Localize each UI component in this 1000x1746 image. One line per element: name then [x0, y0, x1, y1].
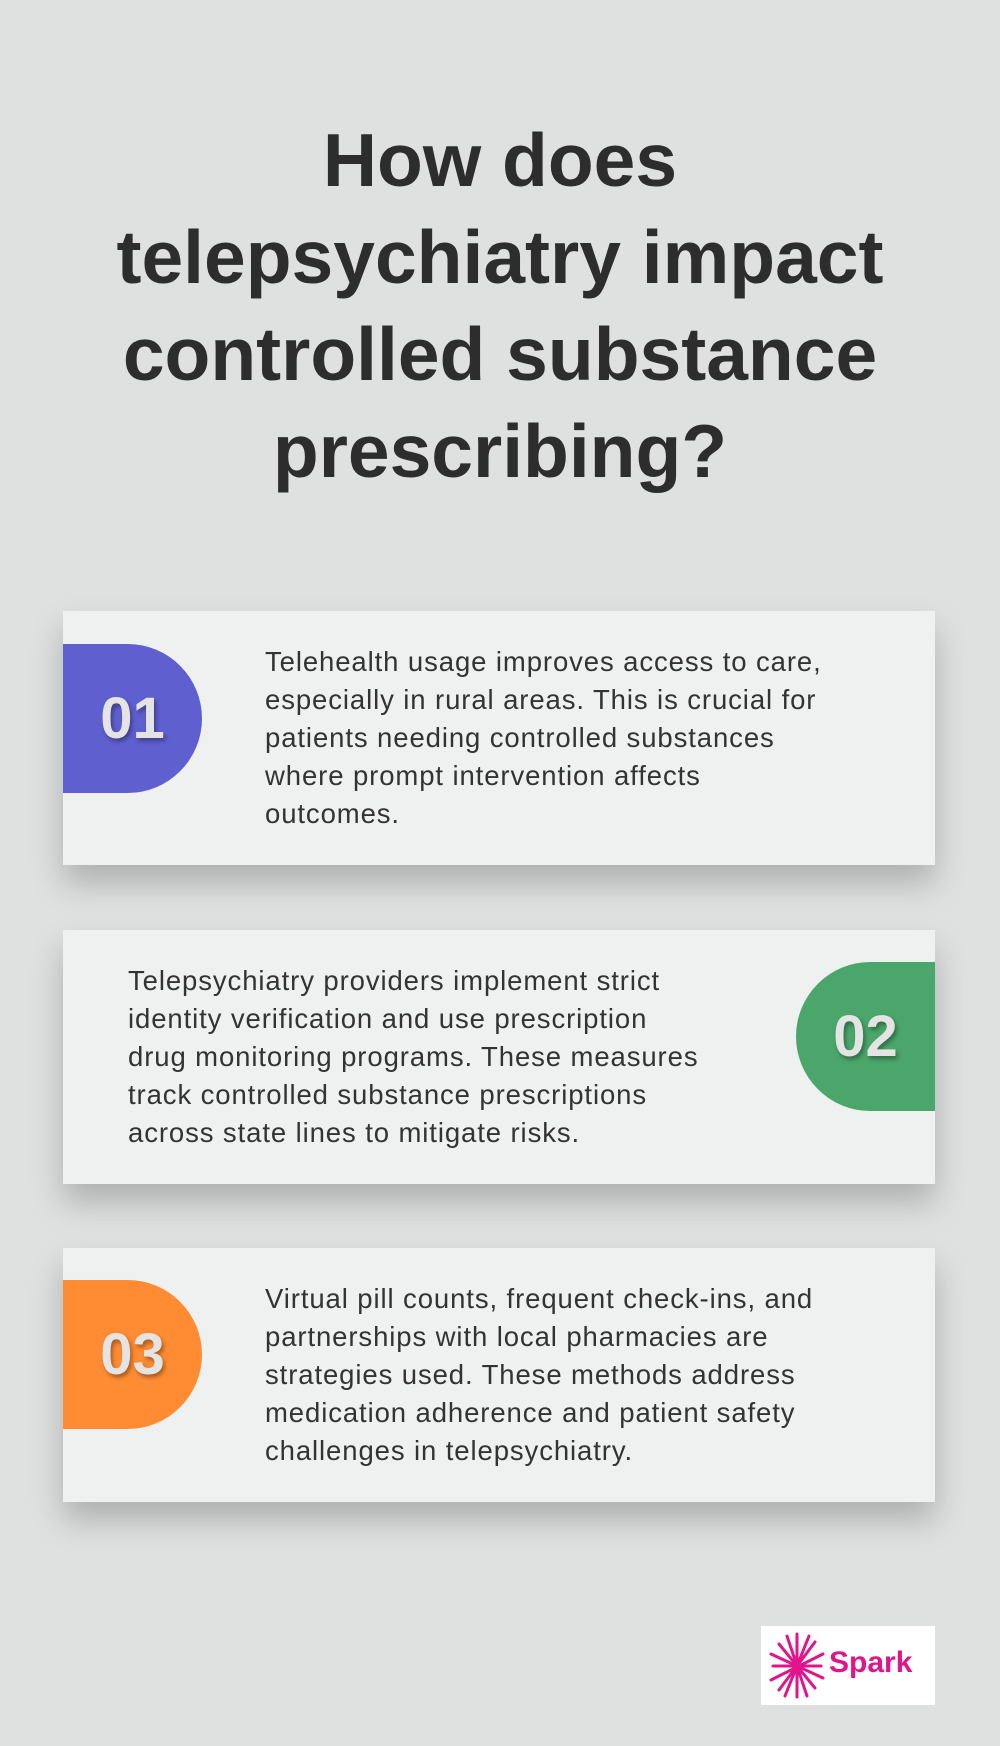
title: How does — [323, 118, 677, 202]
text 2: Telepsychiatry providers implement strict — [128, 965, 660, 996]
text 3 — [265, 1283, 813, 1466]
text 2: across state lines to mitigate risks. — [128, 1117, 580, 1148]
badge 01 — [63, 644, 202, 793]
badge 03: 03 — [100, 1322, 165, 1387]
text 1: especially in rural areas. This is crucial for — [265, 684, 816, 715]
text 3: challenges in telepsychiatry. — [265, 1435, 633, 1466]
text 1: where prompt intervention affects — [265, 760, 701, 791]
title: controlled substance — [123, 312, 877, 396]
text 3: medication adherence and patient safety — [265, 1397, 795, 1428]
text 3: strategies used. These methods address — [265, 1359, 796, 1390]
text 1: Telehealth usage improves access to care, — [265, 646, 822, 677]
badge 02: 02 — [833, 1004, 898, 1069]
title: telepsychiatry impact — [116, 215, 884, 299]
text 3: partnerships with local pharmacies are — [265, 1321, 768, 1352]
title — [116, 118, 884, 493]
panel: card 3 — [63, 1248, 935, 1502]
text 1 — [265, 646, 822, 829]
text 1: outcomes. — [265, 798, 400, 829]
badge 03 — [63, 1280, 202, 1429]
text 2 — [128, 965, 698, 1148]
text 2: track controlled substance prescriptions — [128, 1079, 647, 1110]
logo text: Spark — [829, 1646, 912, 1679]
logo — [761, 1626, 935, 1705]
title: prescribing? — [273, 409, 727, 493]
text 3: Virtual pill counts, frequent check-ins, and — [265, 1283, 813, 1314]
text 1: patients needing controlled substances — [265, 722, 775, 753]
panel: card 2 — [63, 930, 935, 1184]
icon: starburst — [769, 1632, 825, 1698]
text 2: drug monitoring programs. These measures — [128, 1041, 698, 1072]
badge 01: 01 — [100, 686, 165, 751]
panel: card 1 — [63, 611, 935, 865]
badge 02 — [796, 962, 935, 1111]
text 2: identity verification and use prescription — [128, 1003, 647, 1034]
